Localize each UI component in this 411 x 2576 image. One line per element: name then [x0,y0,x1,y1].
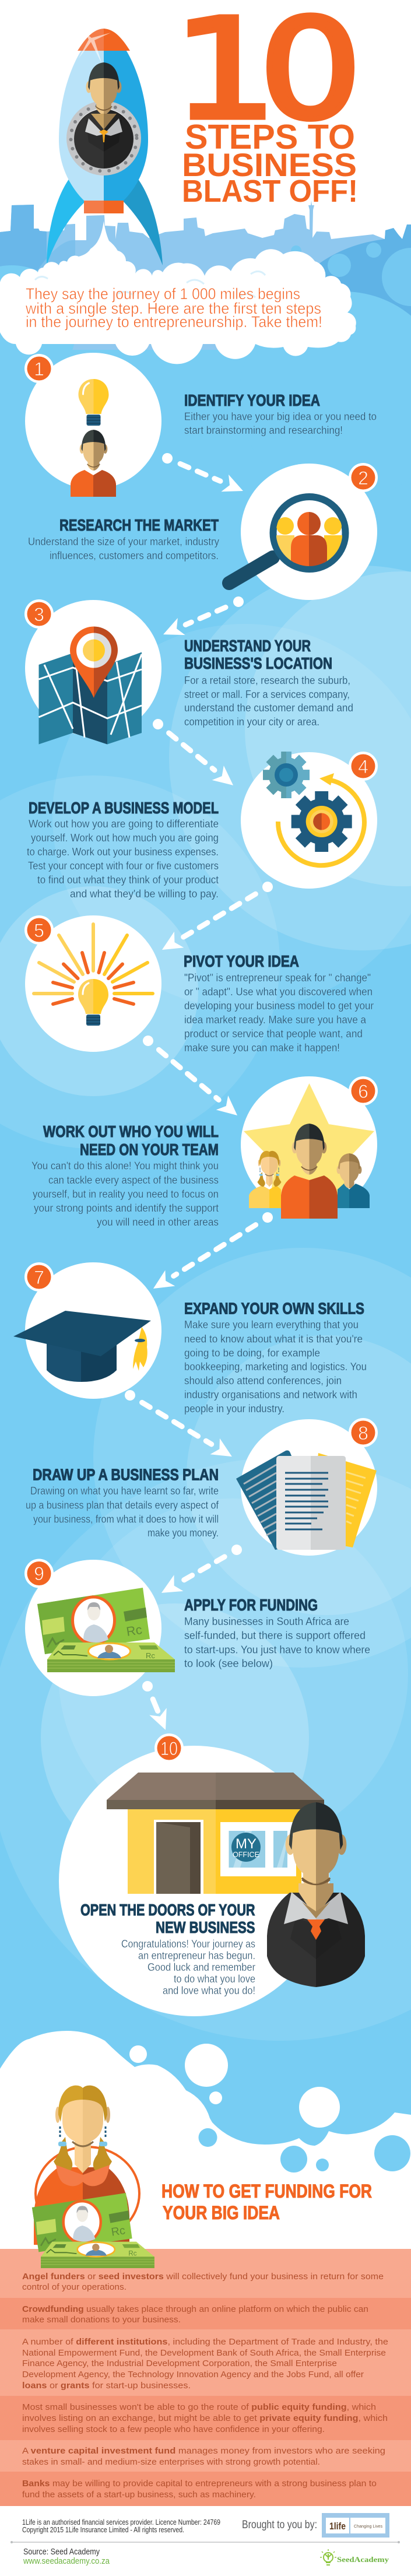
logo: Seed Academy: SeedAcademy [337,2555,389,2564]
text block: Understand the size of your market, industry [28,536,219,548]
background: skyline [0,201,411,501]
text block [28,536,219,561]
icon: business plan documents [236,1451,377,1550]
heading [184,637,332,672]
text block [31,1160,219,1228]
heading [43,1122,219,1159]
icon: gears with circular arrow [263,752,364,865]
text block: make you money. [147,1527,219,1539]
panel: step 9 apply for funding [24,1559,370,1696]
icon: banknotes: Rc [146,1651,155,1660]
text block: Test your concept with four or five customers [28,860,219,872]
rocket [47,29,163,265]
badge 1 [24,354,54,383]
title words: BUSINESS [182,146,357,183]
source: Source: Seed Academy [23,2547,100,2557]
heading: UNDERSTAND YOUR [184,637,311,655]
text block [184,410,377,436]
badge 6: 6 [358,1081,368,1102]
logo: 1Life: 1life [329,2521,346,2532]
icon: office building: MY [236,1836,257,1852]
text block: or " adapt". Use what you discovered when [184,986,373,998]
text block: need to know about what it is that you're [184,1333,363,1345]
text block: to start-ups. You just have to know where [184,1644,370,1656]
text block: and what they'd be willing to pay. [70,888,219,900]
text block: you will need in other areas [97,1216,219,1228]
badge 3 [24,599,54,629]
intro text: in the journey to entrepreneurship. Take them! [26,313,322,331]
intro text: They say the journey of 1 000 miles begins [26,285,300,303]
text block: industry organisations and network with [184,1389,357,1401]
text block: Either you have your big idea or you need to [184,410,377,422]
source [23,2547,110,2566]
legal text: 1Life is an authorised financial services provider. Licence Number: 24769 [22,2518,220,2526]
icon: banknotes: Rc [125,1622,143,1639]
text block: start brainstorming and researching! [184,424,343,436]
text block: idea market ready. Make sure you have a [184,1014,367,1026]
heading: OPEN THE DOORS OF YOUR [80,1901,255,1919]
rocket nose [78,29,130,64]
text block: your strong points and identify the support [34,1202,219,1214]
arrow: step 8 to 9 [157,1539,246,1601]
source: www.seedacademy.co.za [23,2556,110,2566]
text block: to do what you love [174,1973,255,1985]
white cloud [0,221,356,364]
icon: team in front of a star [244,1083,374,1219]
heading: PIVOT YOUR IDEA [184,952,299,970]
badge 8: 8 [358,1423,368,1444]
title words: STEPS TO [185,118,355,156]
text block: Congratulations! Your journey as [121,1938,255,1950]
text: banks [22,2479,377,2500]
rocket fins [47,178,163,265]
text: equity funding: involves listing on an exchange, but might be able to get private equity funding , which [22,2413,388,2423]
panel: step 10 open the doors [59,1733,365,2016]
rocket nozzle [84,201,124,213]
banknotes [32,2193,154,2268]
text block: up a business plan that details every aspect of [26,1500,219,1511]
panel: step 1 identify your idea [24,353,377,497]
panel: step 8 draw up a business plan [26,1418,378,1556]
text: venture capital [22,2446,385,2467]
text block: Good luck and remember [147,1961,255,1973]
text: angel funders: control of your operations. [22,2282,127,2292]
text block: people in your industry. [184,1403,284,1415]
badge 7: 7 [34,1267,44,1288]
text block: your business, from what it does to how it will [33,1514,219,1525]
rocket porthole with pilot [66,62,141,176]
divider [10,2541,400,2543]
text block: self-funded, but there is support offered [184,1630,366,1641]
arrow: step 4 to 5 [157,876,277,958]
text: banks: Banks may be willing to provide capital to entrepreneurs with a strong business plan to [22,2479,377,2489]
text block: You can't do this alone! You might think you [31,1160,219,1172]
text block [26,1485,219,1539]
text block: an entrepreneur has begun. [138,1950,255,1961]
text block: "Pivot" is entrepreneur speak for " change" [184,972,371,984]
panel: step 6 work out your team [31,1076,378,1228]
text: venture capital: A venture capital investment fund manages money from investors who are seeking [22,2446,385,2456]
badge 9 [24,1559,54,1588]
icon: woman holding money [32,2086,154,2268]
badge 2: 2 [358,468,368,489]
arrow: step 1 to 2 [159,448,247,500]
banknotes: Rc [110,2224,127,2239]
text block: to look (see below) [184,1658,273,1669]
panel: step 2 research the market [28,463,378,600]
text: crowdfunding: make small donations to your business. [22,2315,181,2325]
icon: businessman [267,1802,365,1987]
brought to you by: Brought to you by: [242,2519,317,2531]
heading: WORK OUT WHO YOU WILL [43,1122,219,1140]
text: institutions: Development Agency, the Technology Innovation Agency and the Jobs Fund, all offer [22,2370,364,2380]
footer [10,2513,400,2566]
rocket body [59,29,148,201]
heading: BUSINESS'S LOCATION [184,654,332,672]
text block: Work out how you are going to differentiate [29,818,219,830]
icon: magnifying glass over people [229,497,345,583]
legal text: Copyright 2015 1Life Insurance Limited - All rights reserved. [22,2526,184,2534]
arrow: step 5 to 6 [138,1030,243,1122]
logo: Seed Academy [320,2549,389,2565]
text block: Drawing on what you have learnt so far, write [30,1485,219,1497]
icon: office building [107,1773,324,1894]
heading: YOUR BIG IDEA [163,2202,280,2223]
panel: step 4 develop a business model [27,752,378,900]
text: equity funding [22,2402,388,2434]
title words [182,118,358,209]
badge 7 [24,1262,54,1291]
text: equity funding: Most small businesses won't be able to go the route of public equity funding , which [22,2402,376,2412]
text block: street or mall. For a services company, [184,689,350,700]
badge 4: 4 [358,756,368,777]
logo: 1Life [322,2513,389,2538]
heading [80,1901,255,1936]
arrow: step 2 to 3 [160,591,247,643]
badge 6 [349,1076,378,1105]
text: equity funding: involves selling stock to a few people who have confidence in your offering. [22,2424,325,2434]
number 10 [173,0,362,150]
heading: NEED ON YOUR TEAM [80,1140,219,1159]
text block [184,1616,370,1669]
text block: Make sure you learn everything that you [184,1319,359,1331]
text block: to charge. Work out your business expenses. [27,846,219,858]
text block: and love what you do! [163,1985,255,1996]
text block: competition in your city or area. [184,716,319,728]
intro text [25,285,322,331]
badge 2 [349,463,378,492]
text block: should also attend conferences, join [184,1375,342,1387]
icon: shining bulb [34,924,153,1026]
icon: map with location pin [38,626,142,744]
badge 5 [24,915,54,945]
text block: Many businesses in South Africa are [184,1616,349,1627]
badge 5: 5 [34,920,44,941]
text block: bookkeeping, marketing and logistics. You [184,1361,367,1373]
text block: developing your business model to get your [184,1000,374,1012]
text block: going to be doing, for example [184,1347,320,1359]
icon: graduation cap [13,1311,151,1382]
text block: yourself. Work out how much you are going [31,832,219,844]
funding section [0,2086,411,2506]
text: banks: fund the assets of a start-up business, such as machinery. [22,2490,256,2500]
text: institutions: Finance Agency, the Industrial Development Corporation, the Small Enterprise [22,2359,337,2368]
badge 4 [349,752,378,781]
text: angel funders: Angel funders or seed investors will collectively fund your business in return for some [22,2272,384,2282]
heading: HOW TO GET FUNDING FOR [161,2181,372,2202]
title words: BLAST OFF! [182,174,358,209]
panel: step 3 understand your location [24,599,353,744]
arrow: step 9 to 10 [137,1678,174,1733]
text: crowdfunding [22,2304,368,2325]
heading: RESEARCH THE MARKET [59,516,219,534]
badge 8 [349,1418,378,1447]
text block: to find out what they think of your product [37,874,219,886]
text block [184,1319,367,1415]
heading: DRAW UP A BUSINESS PLAN [33,1466,219,1483]
arrow: step 3 to 4 [148,714,239,792]
text block [184,972,374,1054]
badge 3: 3 [34,604,44,625]
banknotes: Rc [128,2251,137,2258]
text block: make sure you can make it happen! [184,1042,340,1054]
text: angel funders [22,2272,384,2292]
text block: product or service that people want, and [184,1028,363,1040]
heading: DEVELOP A BUSINESS MODEL [29,799,219,817]
badge 9: 9 [34,1563,44,1584]
text bands [0,2249,411,2506]
text block [121,1938,255,1996]
arrow: step 7 to 8 [121,1385,237,1465]
text block: For a retail store, research the suburb, [184,675,350,686]
title [173,0,362,209]
text block: influences, customers and competitors. [50,550,219,561]
heading: NEW BUSINESS [156,1918,255,1936]
text: crowdfunding: Crowdfunding usually takes place through an online platform on which the public can [22,2304,368,2314]
heading: IDENTIFY YOUR IDEA [184,391,320,409]
icon: light bulb over person [71,379,116,497]
text block [184,675,353,728]
text block: yourself, but in reality you need to focus on [33,1188,219,1200]
logo: 1Life: Changing Lives [354,2524,382,2529]
text block: understand the customer demand and [184,702,353,714]
icon: banknotes [37,1588,175,1672]
panel: step 7 expand your skills [13,1262,367,1415]
text: institutions [22,2337,388,2391]
badge 1: 1 [34,359,44,380]
heading: EXPAND YOUR OWN SKILLS [184,1299,364,1318]
legal text [22,2518,220,2534]
funding cloud [0,2031,411,2251]
background: soft light swirls [0,566,411,2041]
heading [161,2181,372,2223]
badge 10 [154,1733,184,1763]
text: institutions: National Empowerment Fund, the Development Bank of South Africa, the Small Enterprise [22,2348,386,2358]
text block [27,818,219,900]
badge 10: 10 [160,1738,178,1759]
text: institutions: loans or grants for start-up businesses. [22,2381,191,2391]
arrow: step 6 to 7 [149,1207,277,1297]
panel: step 5 pivot your idea [24,915,374,1054]
heading: APPLY FOR FUNDING [184,1596,318,1614]
text: institutions: A number of different institutions , including the Department of Trade and Industry, the [22,2337,388,2347]
icon: office building: OFFICE [233,1851,259,1859]
text: venture capital: stakes in small- and medium-size enterprises with strong growth potential. [22,2457,320,2467]
intro text: with a single step. Here are the first ten steps [25,300,321,317]
text block: can tackle every aspect of the business [48,1174,219,1186]
